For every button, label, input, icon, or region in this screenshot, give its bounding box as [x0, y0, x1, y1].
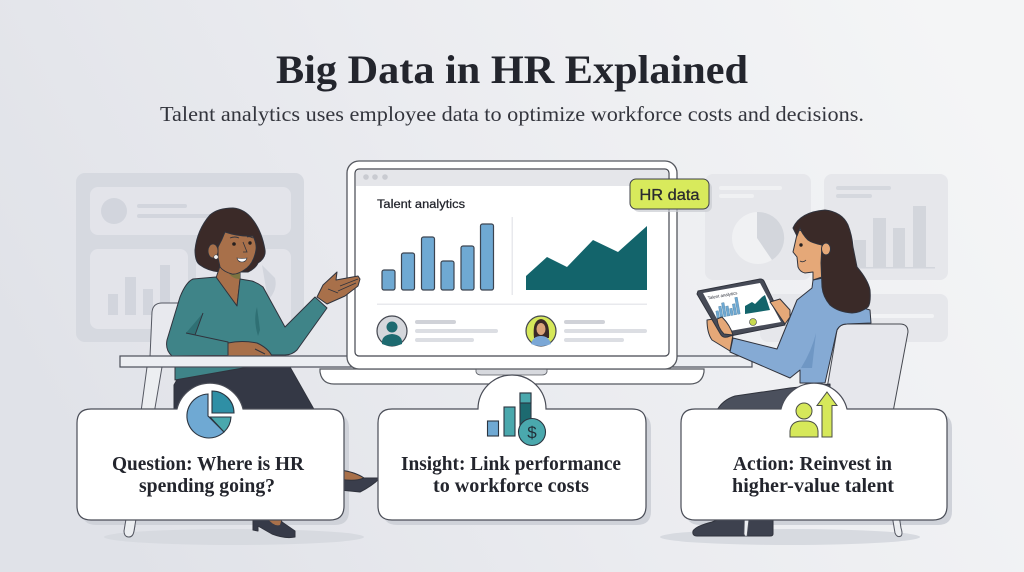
card shadows — [82, 414, 952, 525]
sweater — [167, 277, 327, 356]
title: Big Data in HR Explained — [276, 47, 748, 92]
hair back — [195, 208, 265, 272]
neck — [216, 266, 240, 306]
table leg: left — [125, 367, 162, 537]
chair stem: analyst — [744, 518, 749, 536]
tablet avatar — [750, 318, 756, 326]
card: question — [77, 383, 344, 520]
icon: bars and coin: $ — [527, 423, 537, 442]
card: action — [681, 383, 947, 520]
left hand back — [707, 318, 733, 351]
table — [120, 356, 752, 367]
left thumb — [717, 317, 733, 335]
card text: Action: Reinvest in — [733, 454, 892, 475]
torso and sleeve — [730, 278, 871, 383]
text placeholders — [415, 320, 647, 342]
subtitle: Talent analytics uses employee data to optimize workforce costs and decisions. — [160, 102, 864, 126]
card text: Question: Where is HR — [112, 454, 305, 475]
ear — [822, 243, 830, 255]
ground shadows — [104, 529, 920, 545]
avatar: neutral — [377, 316, 407, 346]
card: insight — [378, 375, 646, 520]
table leg foot — [124, 519, 136, 537]
trousers — [174, 366, 320, 420]
avatar: woman — [526, 316, 556, 346]
icon: person and arrow — [790, 392, 837, 437]
icon: pie chart — [187, 391, 234, 438]
screen — [355, 169, 669, 356]
laptop bezel — [347, 161, 677, 369]
tablet — [697, 279, 785, 337]
chair: left — [150, 303, 182, 357]
screen title: Talent analytics — [377, 199, 465, 211]
card text: to workforce costs — [433, 476, 589, 497]
chair leg: right — [892, 515, 902, 537]
ear — [208, 244, 218, 258]
card text: spending going? — [139, 476, 275, 497]
tag: HR data — [630, 179, 712, 212]
card text — [401, 454, 621, 497]
face — [218, 232, 256, 274]
trousers — [716, 384, 830, 412]
card text — [732, 454, 895, 497]
face — [793, 230, 828, 280]
area chart — [526, 226, 647, 290]
shoe: presenter left foot — [253, 518, 295, 538]
background dashboard: left — [76, 173, 304, 342]
laptop base — [320, 369, 704, 384]
chair: right — [823, 324, 908, 412]
boots: analyst — [693, 518, 773, 536]
tag: HR data: HR data — [640, 187, 700, 204]
tablet bars — [714, 297, 740, 318]
laptop — [320, 161, 704, 384]
hand on table — [228, 342, 272, 356]
right hand — [770, 299, 790, 324]
hair — [793, 210, 870, 313]
shoe: presenter right foot — [340, 470, 380, 492]
figure: analyst — [697, 210, 871, 412]
card text — [112, 454, 305, 497]
tablet area — [745, 295, 770, 314]
bar chart — [382, 224, 494, 290]
background dashboard: right — [705, 174, 948, 342]
face details — [208, 237, 253, 262]
icon: bars and coin — [488, 393, 546, 446]
card text: higher-value talent — [732, 476, 895, 497]
presenter arm and hand — [317, 272, 360, 304]
card text: Insight: Link performance — [401, 454, 621, 475]
face details: analyst — [799, 243, 806, 262]
figure: presenter — [167, 208, 327, 420]
tablet screen label: Talent analytics — [707, 290, 739, 300]
